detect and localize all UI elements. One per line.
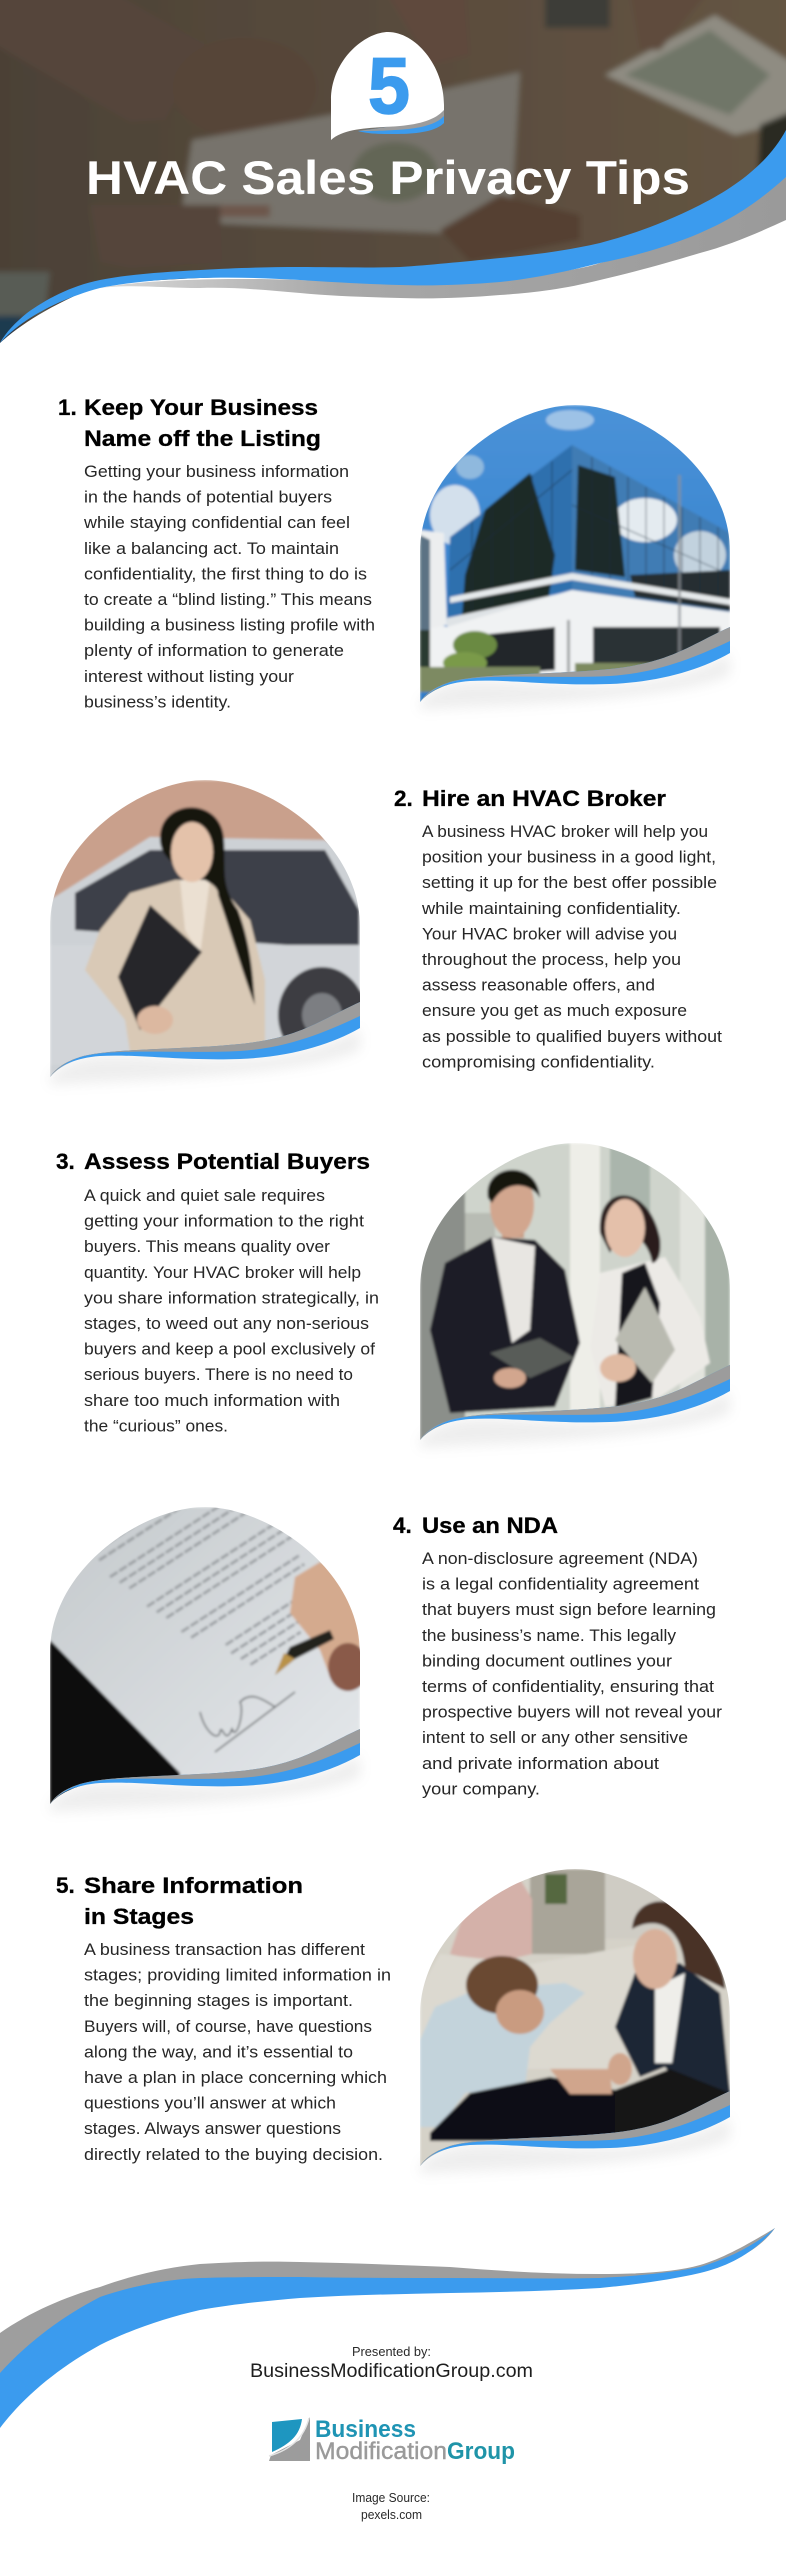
presented by: Presented by: [352, 2345, 431, 2359]
tip 2 body: position your business in a good light, [422, 849, 716, 867]
tip 4 heading: Use an NDA [422, 1513, 558, 1538]
tip 4 body: terms of confidentiality, ensuring that [422, 1678, 714, 1696]
tip 4 body: prospective buyers will not reveal your [422, 1704, 723, 1722]
badge: number 5: 5 [368, 41, 410, 130]
website: BusinessModificationGroup.com [250, 2361, 533, 2382]
tip 5 body: directly related to the buying decision. [84, 2146, 383, 2164]
wave [420, 2091, 730, 2166]
tip 1 body: while staying confidential can feel [83, 514, 350, 532]
tip 4 body: the business’s name. This legally [422, 1627, 677, 1645]
image source [352, 2491, 430, 2522]
tip 3 heading: Assess Potential Buyers [84, 1149, 370, 1174]
title: HVAC Sales Privacy Tips [86, 151, 690, 204]
tip 4 body: binding document outlines your [422, 1652, 673, 1670]
tip 4 body: A non-disclosure agreement (NDA) [422, 1550, 698, 1568]
tip 5 body: stages. Always answer questions [84, 2120, 341, 2138]
tip 5 heading: 5. [56, 1873, 75, 1898]
white area below wave [0, 177, 786, 400]
tip 2 body: A business HVAC broker will help you [422, 823, 708, 841]
tip 4 text [393, 1513, 723, 1798]
photo: woman with folder [50, 780, 366, 1085]
tip 2 body: throughout the process, help you [422, 951, 681, 969]
tip 2 body: while maintaining confidentiality. [421, 900, 681, 918]
tip 2 body [421, 823, 722, 1071]
tip 2 body: compromising confidentiality. [422, 1053, 655, 1071]
tip 2 body: as possible to qualified buyers without [422, 1028, 722, 1046]
badge: number 5 [331, 32, 444, 140]
tip 5 body: the beginning stages is important. [84, 1992, 353, 2010]
tip 3 text [56, 1149, 379, 1435]
logo: Group [447, 2438, 515, 2465]
blue footer wave [0, 2228, 775, 2428]
tip 5 heading: Share Information [84, 1873, 303, 1898]
tip 1 body: interest without listing your [84, 668, 295, 686]
tip 4 body: is a legal confidentiality agreement [422, 1576, 699, 1594]
tip 3 body: getting your information to the right [84, 1213, 364, 1231]
tip 3 body: serious buyers. There is no need to [84, 1366, 353, 1384]
tip 5 body: along the way, and it’s essential to [84, 2043, 353, 2061]
tip 1 body: business’s identity. [84, 693, 231, 711]
tip 2 body: setting it up for the best offer possible [422, 874, 717, 892]
tip 5 heading: in Stages [84, 1904, 194, 1929]
tip 2 text [394, 786, 722, 1071]
gray footer wave [0, 2228, 775, 2385]
photo: couple with broker on sofa [420, 1869, 730, 2174]
tip 5 body: A business transaction has different [84, 1941, 365, 1959]
photo: glass office building [420, 405, 730, 710]
tip 4 body: and private information about [422, 1755, 659, 1773]
tip 2 body: ensure you get as much exposure [422, 1002, 687, 1020]
tip 1 heading: Keep Your Business [84, 395, 318, 420]
tip 4 body [422, 1550, 723, 1798]
footer wave [0, 2228, 775, 2428]
image source: pexels.com [361, 2508, 422, 2522]
tip 3 body: quantity. Your HVAC broker will help [84, 1264, 361, 1282]
tip 2 body: Your HVAC broker will advise you [422, 925, 677, 943]
tip 5 body: questions you’ll answer at which [84, 2095, 336, 2113]
logo: Modification [315, 2438, 447, 2465]
photo: two business people [420, 1143, 730, 1448]
tip 1 body: in the hands of potential buyers [84, 489, 332, 507]
tip 5 body: have a plan in place concerning which [84, 2069, 387, 2087]
tip 3 body: stages, to weed out any non-serious [84, 1315, 369, 1333]
tip 3 body: buyers. This means quality over [84, 1238, 331, 1256]
tip 3 body: share too much information with [84, 1392, 340, 1410]
tip 3 body: buyers and keep a pool exclusively of [84, 1341, 375, 1359]
logo: Business [315, 2416, 416, 2443]
tip 3 body: you share information strategically, in [84, 1289, 379, 1307]
image source: Image Source: [352, 2491, 430, 2505]
tip 4 body: that buyers must sign before learning [422, 1601, 716, 1619]
tip 3 body [84, 1187, 379, 1435]
tip 4 heading: 4. [393, 1513, 412, 1538]
tip 1 heading: Name off the Listing [84, 426, 321, 451]
tip 2 heading: Hire an HVAC Broker [422, 786, 666, 811]
wave [420, 1365, 730, 1440]
tip 5 body [84, 1941, 391, 2164]
tip 1 body: like a balancing act. To maintain [84, 540, 339, 558]
gray wave [100, 177, 786, 298]
tip 2 heading: 2. [394, 786, 413, 811]
tip 2 body: assess reasonable offers, and [422, 977, 655, 995]
tip 4 body: your company. [422, 1780, 540, 1798]
tip 3 heading: 3. [56, 1149, 75, 1174]
wave [50, 1002, 360, 1077]
tip 4 body: intent to sell or any other sensitive [422, 1729, 688, 1747]
photo: signing a document [50, 1507, 360, 1812]
header background photo [0, 0, 786, 350]
logo icon [269, 2417, 310, 2461]
tip 1 body: Getting your business information [84, 463, 349, 481]
tip 1 body: plenty of information to generate [84, 642, 344, 660]
tip 3 body: the “curious” ones. [84, 1417, 228, 1435]
tip 1 text [58, 395, 375, 711]
tip 5 text [56, 1873, 391, 2164]
tip 1 body: confidentiality, the first thing to do is [84, 565, 367, 583]
tip 5 body: Buyers will, of course, have questions [84, 2018, 372, 2036]
tip 1 heading: 1. [58, 395, 77, 420]
presented by [250, 2345, 533, 2382]
tip 1 body: to create a “blind listing.” This means [84, 591, 372, 609]
logo [269, 2416, 515, 2465]
header banner [0, 0, 786, 400]
tip 1 heading [58, 395, 321, 451]
tip 5 body: stages; providing limited information in [84, 1967, 391, 1985]
tip 1 body [83, 463, 375, 711]
tip 1 body: building a business listing profile with [84, 617, 375, 635]
wave [50, 1729, 360, 1804]
tip 5 heading [56, 1873, 303, 1929]
wave [420, 627, 730, 702]
tip 3 body: A quick and quiet sale requires [84, 1187, 325, 1205]
blue wave [0, 130, 786, 343]
